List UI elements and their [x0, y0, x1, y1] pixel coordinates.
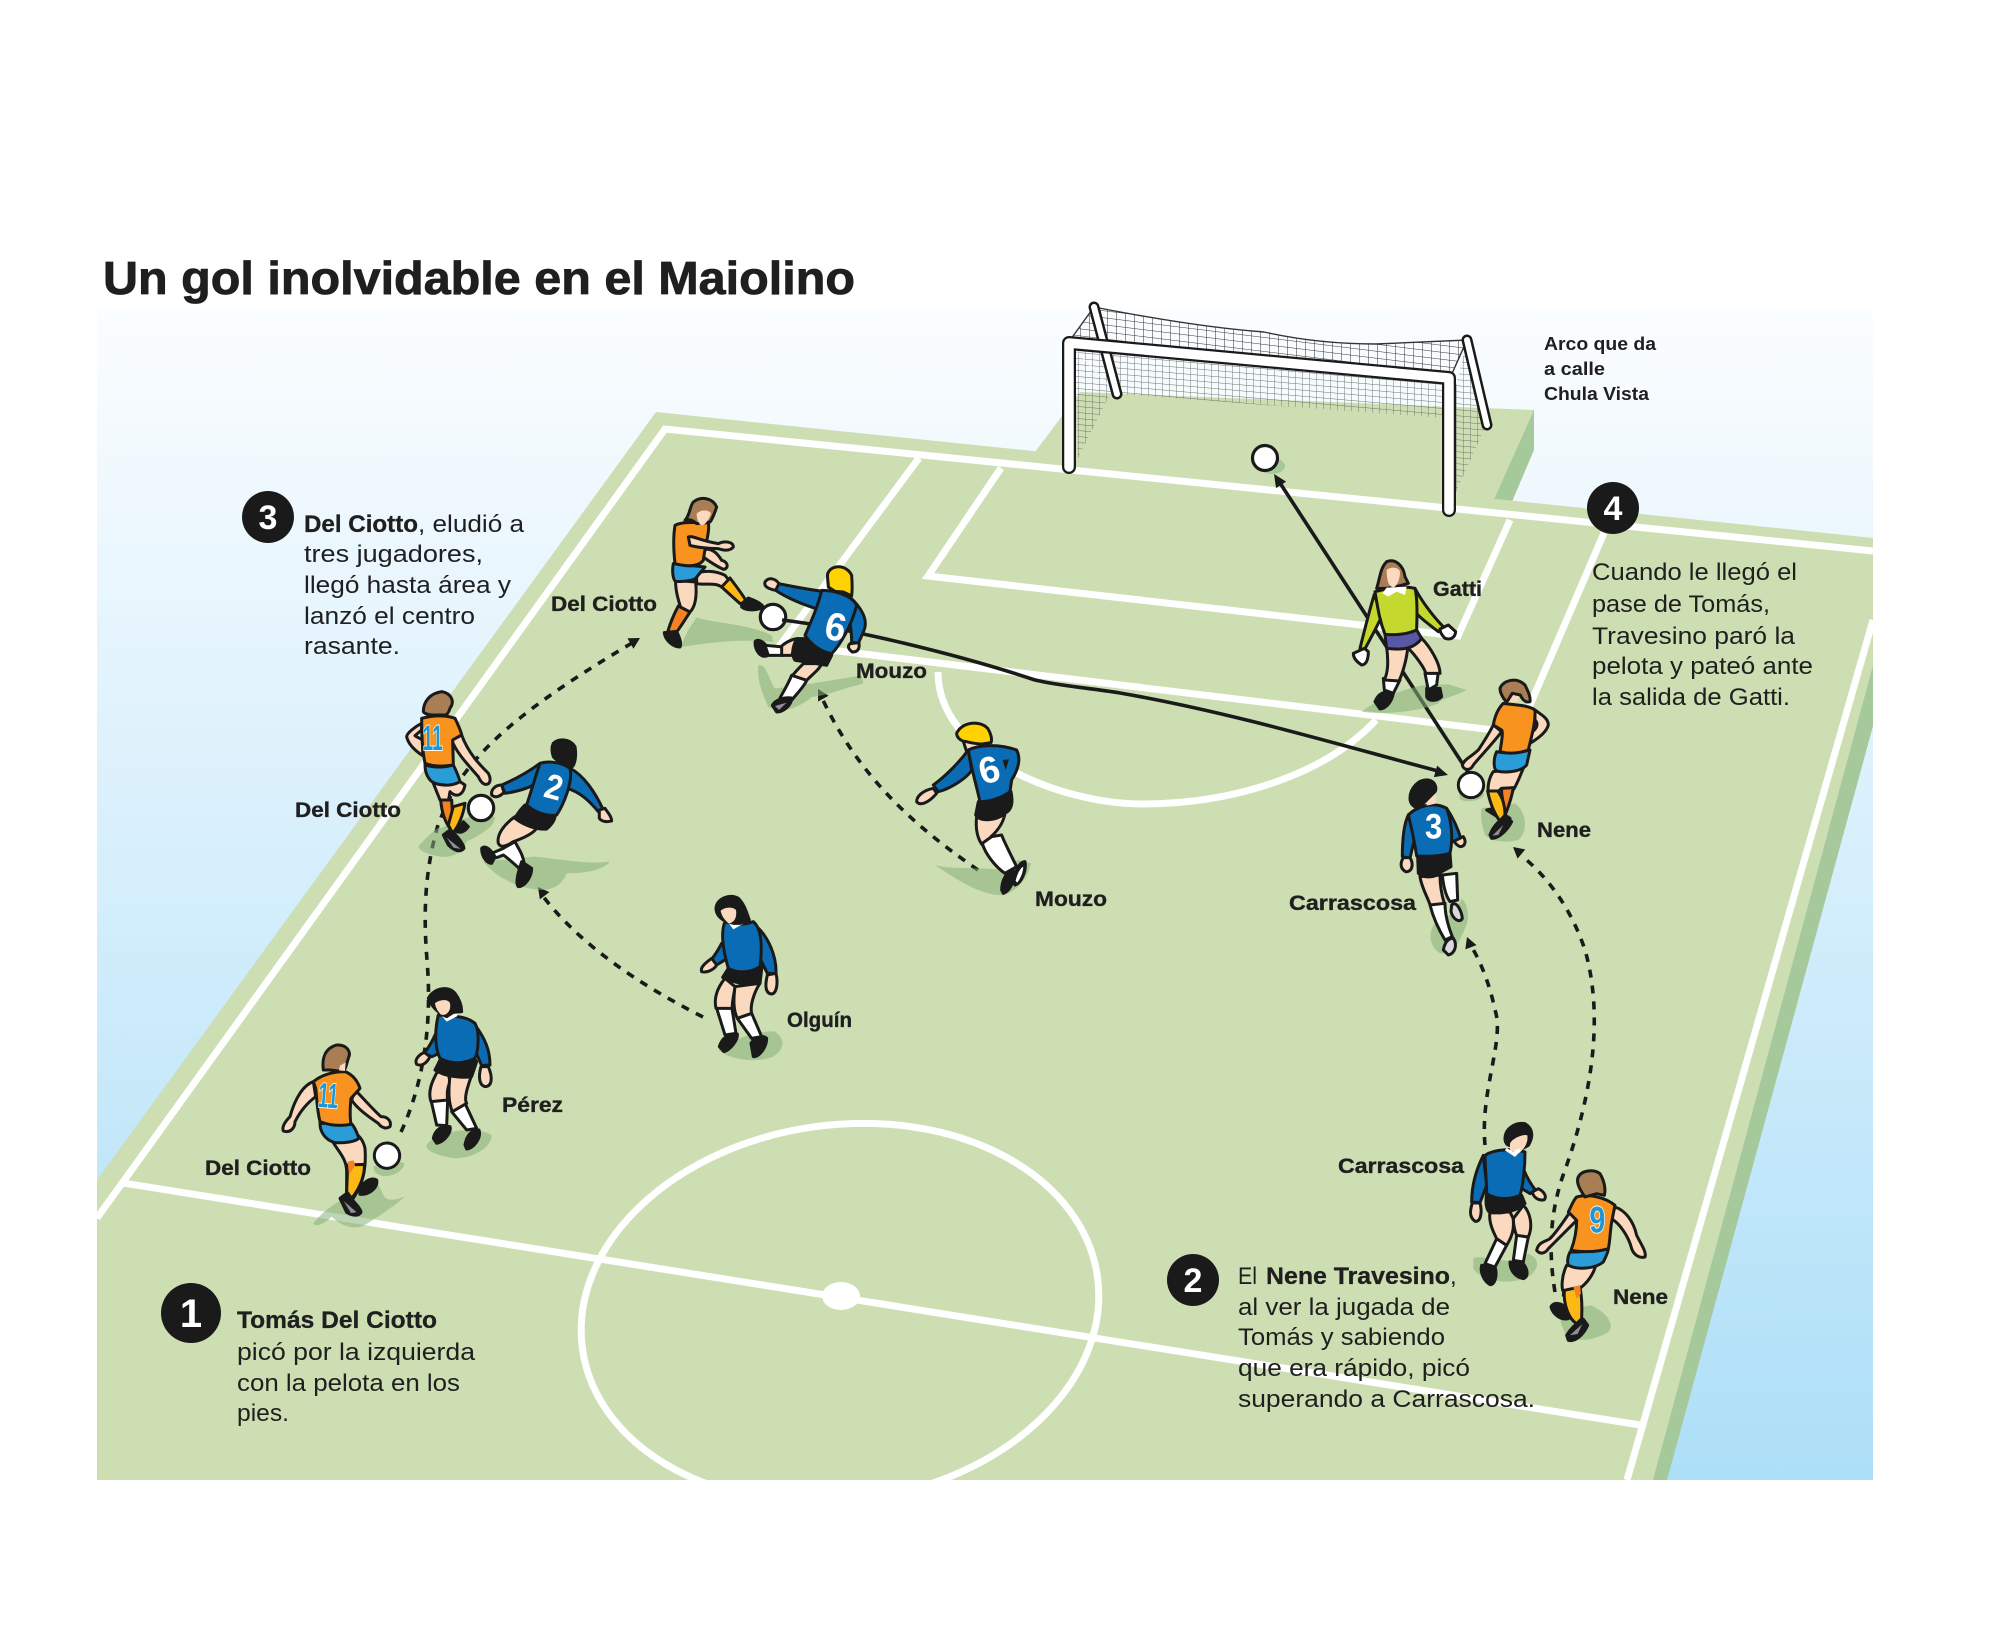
label: Arco que da a calle Chula Vista: Chula Vista: [1544, 384, 1650, 404]
step 2 callout: ,: [1450, 1263, 1457, 1290]
badge 2: 2: [1184, 1262, 1202, 1300]
step 3 callout: , eludió a: [418, 511, 525, 538]
player name labels: Gatti: [1433, 578, 1482, 601]
step 2 callout: Tomás y sabiendo: [1238, 1324, 1445, 1351]
player: Del Ciotto crossing: [664, 498, 773, 647]
player: Pérez: [416, 989, 492, 1158]
run arrow: Nene: [1509, 842, 1594, 1292]
step 2 callout: que era rápido, picó: [1238, 1355, 1470, 1382]
ball at Del Ciotto's feet: [468, 795, 494, 821]
badge 2: [1167, 1254, 1219, 1306]
player: Nene 9 running: [1537, 1171, 1645, 1341]
player: Nene 9 running: 9: [1589, 1199, 1605, 1241]
label: Arco que da a calle Chula Vista: a calle: [1544, 359, 1605, 379]
run arrow: Del Ciotto: [401, 633, 643, 1132]
step 4 callout: la salida de Gatti.: [1592, 684, 1790, 711]
player name labels: Del Ciotto: [295, 799, 401, 822]
pass line to Nene: [782, 620, 1450, 781]
shot line to goal: [1269, 471, 1468, 772]
step 2 callout: al ver la jugada de: [1238, 1294, 1450, 1321]
player: Olguín: [701, 896, 782, 1060]
step 3 callout: lanzó el centro: [304, 603, 475, 630]
player: Mouzo 6 running: [917, 723, 1031, 895]
step 1 callout: Tomás Del Ciotto: [237, 1307, 437, 1334]
step 4 callout: pase de Tomás,: [1592, 591, 1770, 618]
step 3 callout: [242, 491, 525, 660]
player: Carrascosa 3: [1401, 780, 1468, 955]
ball at Del Ciotto's kick: [760, 604, 786, 630]
step 1 callout: pies.: [237, 1400, 289, 1427]
player name labels: Mouzo: [1035, 888, 1107, 911]
player name labels: Del Ciotto: [551, 593, 657, 616]
player: Carrascosa marking: [1471, 1123, 1545, 1285]
step 4 callout: Cuando le llegó el: [1592, 559, 1797, 586]
run arrow: Olguín: [533, 883, 703, 1017]
player: Mouzo 6 sliding: 6: [821, 604, 850, 651]
step 1 callout: picó por la izquierda: [237, 1339, 476, 1366]
step 4 callout: Travesino paró la: [1592, 623, 1796, 650]
player: Del Ciotto 11 with ball: 11: [317, 1076, 340, 1116]
step 3 callout: llegó hasta área y: [304, 572, 511, 599]
title: Un gol inolvidable en el Maiolino: [103, 252, 855, 304]
player: Del Ciotto 11 dribbling: 11: [423, 719, 443, 758]
player name labels: Carrascosa: [1289, 892, 1416, 915]
sky background panel: [97, 310, 1873, 1480]
step 2 callout: superando a Carrascosa.: [1238, 1386, 1535, 1413]
badge 1: [161, 1283, 221, 1343]
step 3 callout: rasante.: [304, 633, 400, 660]
badge 4: [1587, 482, 1639, 534]
goal platform: [1036, 392, 1534, 499]
badge 3: 3: [259, 499, 277, 537]
player name labels: Carrascosa: [1338, 1155, 1464, 1178]
player: defender number 2: 2: [540, 766, 567, 809]
player: Carrascosa 3: 3: [1425, 807, 1442, 846]
step 3 callout: tres jugadores,: [304, 541, 483, 568]
player: Nene with ball: [1458, 680, 1548, 842]
step 1 callout: con la pelota en los: [237, 1370, 460, 1397]
player: defender number 2: [482, 740, 612, 890]
label: Arco que da a calle Chula Vista: [1544, 334, 1657, 404]
football pitch: [97, 392, 1873, 1535]
player: Del Ciotto 11 dribbling: [407, 692, 495, 857]
player name labels: Nene: [1613, 1286, 1668, 1309]
step 2 callout: [1167, 1254, 1535, 1413]
run arrow: Carrascosa: [1461, 935, 1497, 1145]
step 3 callout: Del Ciotto: [304, 511, 418, 538]
step 2 callout: El: [1238, 1263, 1257, 1290]
player: goalkeeper Gatti: [1353, 561, 1467, 713]
player: Mouzo 6 sliding: [755, 567, 865, 712]
label: Arco que da a calle Chula Vista: Arco que da: [1544, 334, 1657, 354]
player name labels: Nene: [1537, 819, 1591, 842]
step 4 callout: [1587, 482, 1813, 711]
badge 3: [242, 491, 294, 543]
player name labels: Mouzo: [856, 660, 927, 683]
badge 4: 4: [1604, 490, 1623, 528]
step 1 callout: [161, 1283, 476, 1427]
step 4 callout: pelota y pateó ante: [1592, 653, 1813, 680]
player name labels: Pérez: [502, 1094, 563, 1117]
step 2 callout: Nene Travesino: [1266, 1263, 1450, 1290]
player: Del Ciotto 11 with ball: [283, 1045, 405, 1227]
ball in goal: [1252, 446, 1285, 474]
goal with net: [1068, 307, 1487, 510]
player name labels: Del Ciotto: [205, 1157, 311, 1180]
run arrow: Mouzo: [813, 686, 978, 870]
player: Mouzo 6 running: 6: [974, 747, 1004, 793]
badge 1: 1: [180, 1292, 202, 1336]
player name labels: [205, 578, 1668, 1309]
player name labels: Olguín: [787, 1009, 852, 1032]
